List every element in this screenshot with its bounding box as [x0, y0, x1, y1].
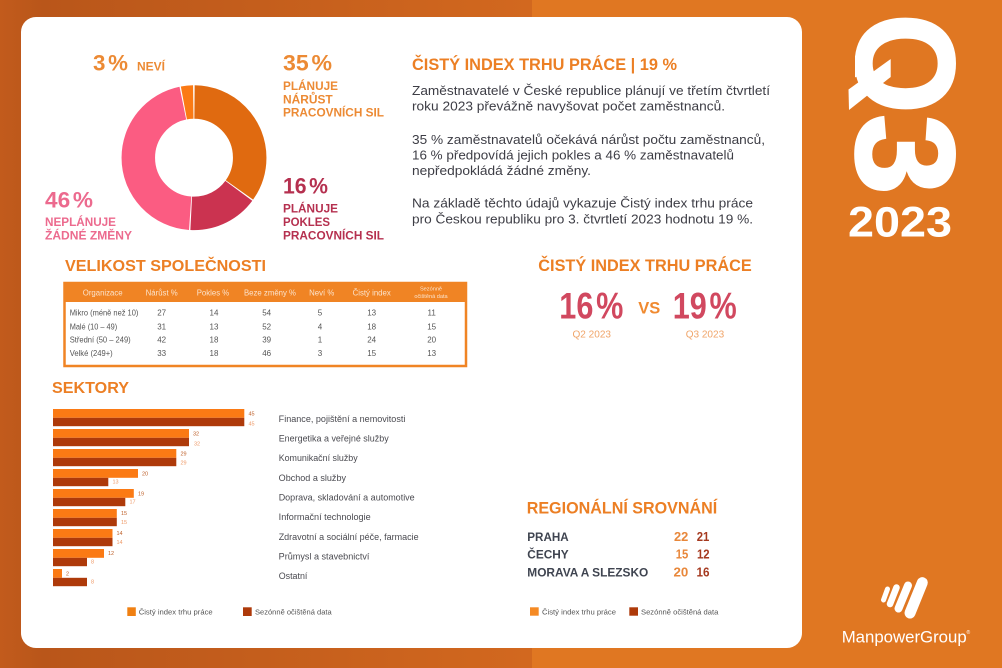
comparison: Q2 vs Q3: Q3 2023 [686, 329, 724, 341]
legend: sectors: Čistý index trhu práce [139, 607, 213, 616]
bar chart: sectors: 8 [91, 560, 94, 566]
comparison: Q2 vs Q3: Q2 2023 [572, 329, 611, 341]
bar chart: sectors: 15 [121, 511, 127, 517]
legend: regions: Čistý index trhu práce [542, 607, 616, 616]
legend: regions [530, 607, 719, 616]
bar chart: sectors: 17 [130, 500, 136, 506]
regional table: 16 [696, 565, 710, 580]
bar chart: sectors [53, 409, 255, 586]
regional table: 20 [674, 565, 688, 580]
bar chart: sectors: 2 [66, 572, 69, 578]
table: company size: 1 [318, 336, 323, 345]
table: company size: 13 [427, 349, 437, 358]
bar chart: sectors: 12 [108, 551, 114, 557]
table: company size: Mikro (méně než 10) [70, 309, 139, 318]
sector labels: Komunikační služby [279, 453, 358, 463]
table: company size: 39 [262, 336, 272, 345]
table: company size: 27 [157, 309, 167, 318]
donut label: 16 % decline: PRACOVNÍCH SIL [283, 229, 384, 242]
text block: summary: roku 2023 převážně navyšovat počet zaměstnanců. [412, 99, 725, 114]
table: company size: 18 [210, 349, 219, 358]
bar chart: sectors: 32 [194, 442, 200, 448]
sector labels: Ostatní [279, 571, 308, 581]
table: company size: Čistý index [353, 288, 391, 298]
comparison: Q2 vs Q3: 16 % [559, 285, 623, 326]
donut label: 3 % nevi: 3 % [93, 51, 128, 76]
title: rotated Q3: 3 [827, 114, 982, 195]
heading: net index 19 %: ČISTÝ INDEX TRHU PRÁCE | 19 % [412, 55, 677, 74]
bar chart: sectors: 19 [138, 492, 144, 498]
table: company size: Střední (50 – 249) [70, 336, 131, 345]
bar chart: sectors: 14 [116, 540, 123, 546]
regional table: 15 [676, 547, 688, 562]
table: company size: 31 [157, 322, 167, 331]
logo wordmark: ManpowerGroup [842, 627, 967, 646]
heading: company size: VELIKOST SPOLEČNOSTI [65, 256, 266, 275]
table: company size: 13 [367, 309, 377, 318]
sector labels: Informační technologie [279, 512, 371, 522]
donut label: 16 % decline: POKLES [283, 217, 330, 229]
donut label: 35 % growth: 35 % [283, 51, 332, 76]
year: 2023: 2023 [848, 199, 952, 247]
sector labels: Obchod a služby [279, 473, 346, 483]
table: company size: Beze změny % [244, 288, 296, 298]
regional table: 12 [697, 547, 710, 562]
table: company size: 54 [262, 309, 272, 318]
table: company size: Organizace [83, 288, 123, 298]
sector labels: Doprava, skladování a automotive [279, 493, 415, 503]
text block: summary: Na základě těchto údajů vykazuje Čistý index trhu práce [412, 196, 753, 211]
table: company size: 46 [262, 349, 272, 358]
sector labels: Průmysl a stavebnictví [279, 552, 370, 562]
table: company size: 42 [157, 336, 167, 345]
table: company size: Malé (10 – 49) [70, 322, 117, 331]
donut label: 35 % growth: PRACOVNÍCH SIL [283, 107, 384, 120]
sector labels [279, 414, 419, 581]
donut label: 35 % growth: NÁRŮST [283, 92, 333, 106]
panel: white content card [21, 17, 802, 648]
heading: net index comparison: ČISTÝ INDEX TRHU PRÁCE [538, 256, 752, 275]
icon: ManpowerGroup logo mark [884, 583, 922, 613]
bar chart: sectors: 45 [248, 412, 255, 418]
sector labels: Energetika a veřejné služby [279, 434, 389, 444]
donut label: 16 % decline: 16 % [283, 173, 328, 198]
table: company size: Velké (249+) [70, 349, 113, 358]
bar chart: sectors: 29 [180, 452, 187, 458]
legend: sectors [127, 607, 332, 616]
legend: regions: Sezónně očištěná data [641, 607, 719, 616]
table: company size: 13 [210, 322, 219, 331]
regional table: 22 [674, 529, 688, 544]
bar chart: sectors: 29 [180, 460, 187, 466]
text block: summary: 35 % zaměstnavatelů očekává nárůst počtu zaměstnanců, [412, 132, 765, 147]
table: company size: 11 [428, 309, 436, 318]
bar chart: sectors: 45 [248, 422, 255, 428]
table: company size: 15 [367, 349, 377, 358]
table: company size: Neví % [309, 288, 334, 298]
bar chart: sectors: 13 [112, 480, 119, 486]
regional table: ČECHY [527, 547, 569, 562]
table: company size: 52 [262, 322, 272, 331]
sector labels: Finance, pojištění a nemovitosti [279, 414, 405, 424]
table: company size: Nárůst % [146, 288, 178, 298]
heading: regional comparison: REGIONÁLNÍ SROVNÁNÍ [527, 498, 719, 517]
regional table [527, 529, 710, 580]
table: company size: Pokles % [197, 288, 229, 298]
table: company size: 5 [318, 309, 323, 318]
comparison: Q2 vs Q3 [559, 285, 737, 341]
comparison: Q2 vs Q3: 19 % [673, 285, 737, 326]
regional table: MORAVA A SLEZSKO [527, 566, 648, 580]
text block: summary: nepředpokládá žádné změny. [412, 163, 591, 178]
table: company size: 18 [210, 336, 219, 345]
logo wordmark: ® [966, 629, 970, 636]
donut label: 16 % decline: PLÁNUJE [283, 203, 338, 216]
donut label: 46 % no change: NEPLÁNUJE [45, 216, 116, 229]
regional table: 21 [697, 529, 709, 544]
donut chart: workforce plans [138, 102, 250, 213]
table: company size: 4 [318, 322, 323, 331]
donut label: 35 % growth: PLÁNUJE [283, 80, 338, 93]
comparison: Q2 vs Q3: VS [638, 299, 660, 317]
table: company size: 20 [427, 336, 437, 345]
bar chart: sectors: 14 [116, 531, 123, 537]
legend: sectors: Sezónně očištěná data [255, 607, 332, 616]
title: rotated Q3 [848, 18, 956, 191]
donut label: 46 % no change: 46 % [45, 188, 93, 213]
table: company size: 18 [367, 322, 377, 331]
donut label: 16 % decline [283, 173, 384, 242]
table: company size: 3 [318, 349, 323, 358]
text block: summary: 16 % předpovídá jejich pokles a 46 % zaměstnavatelů [412, 147, 734, 162]
regional table: PRAHA [527, 530, 569, 544]
title: rotated Q3: Q [827, 14, 984, 114]
text block: summary: Zaměstnavatelé v České republice plánují ve třetím čtvrtletí [412, 83, 770, 98]
donut label: 35 % growth [283, 51, 384, 120]
bar chart: sectors: 8 [91, 580, 94, 586]
bar chart: sectors: 20 [142, 472, 148, 478]
table: company size: Sezónně [420, 287, 442, 293]
table: company size: 24 [367, 336, 377, 345]
donut label: 46 % no change: ŽÁDNÉ ZMĚNY [45, 229, 132, 242]
donut label: 3 % nevi: NEVÍ [137, 61, 166, 74]
donut label: 3 % nevi [93, 51, 166, 76]
table: company size [64, 282, 467, 366]
heading: sectors: SEKTORY [52, 380, 129, 397]
text block: summary [412, 83, 770, 226]
table: company size: 14 [210, 309, 219, 318]
bar chart: sectors: 15 [121, 520, 127, 526]
bar chart: sectors: 32 [193, 432, 199, 438]
table: company size: 15 [427, 322, 437, 331]
sector labels: Zdravotní a sociální péče, farmacie [279, 532, 419, 542]
text block: summary: pro Českou republiku pro 3. čtvrtletí 2023 hodnotu 19 %. [412, 211, 753, 226]
table: company size: očištěná data [414, 294, 449, 300]
table: company size: 33 [157, 349, 167, 358]
donut label: 46 % no change [45, 188, 132, 242]
